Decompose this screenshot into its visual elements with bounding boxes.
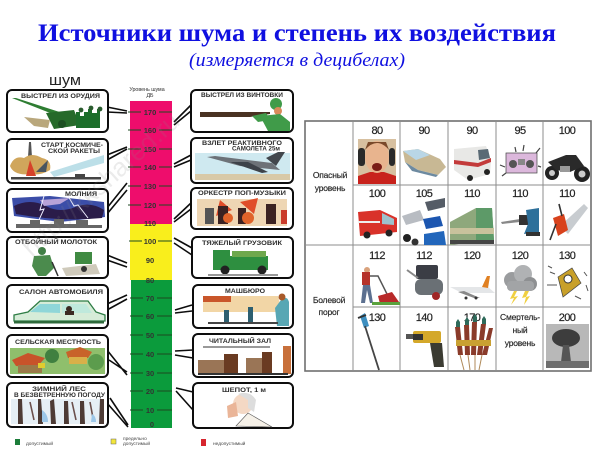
legend: limit: допустимый	[123, 440, 150, 447]
chart: noise level scale: 130	[144, 182, 156, 191]
panel: car interior	[7, 285, 127, 328]
label: lethal level: ный	[513, 325, 528, 335]
table numbers: 112	[369, 250, 385, 262]
icon: fire engine	[358, 210, 397, 238]
label: lethal level: уровень	[505, 338, 536, 348]
chart: noise level scale: 30	[146, 369, 154, 378]
icon: thundercloud	[504, 265, 537, 305]
panel: lightning	[7, 183, 127, 232]
panel: heavy truck	[174, 237, 293, 278]
icon: jackhammer	[358, 313, 379, 370]
chart: noise level scale: 120	[144, 201, 156, 210]
chart: noise level scale: 20	[146, 387, 154, 396]
panel: rifle shot	[174, 90, 293, 132]
table numbers: 90	[466, 125, 478, 137]
legend: limit	[111, 437, 150, 447]
table numbers: 120	[512, 250, 529, 262]
panel: winter forest: ЗИМНИЙ ЛЕС	[32, 384, 86, 393]
panel: countryside	[7, 335, 127, 377]
chart: noise level scale: 40	[146, 350, 154, 359]
legend: limit: предельно	[123, 437, 147, 442]
panel: reading room	[175, 334, 293, 377]
legend: permissible: допустимый	[26, 440, 53, 447]
chart: noise level scale: 110	[144, 219, 156, 228]
chart: noise level scale: 140	[144, 163, 156, 172]
chart: noise level scale: 90	[146, 256, 154, 265]
label: dangerous level	[313, 170, 348, 193]
panel: whisper	[176, 383, 293, 428]
icon: chainsaw	[550, 204, 588, 240]
legend	[15, 437, 246, 447]
scale caption: Уровень шума	[129, 87, 165, 93]
chart: noise level scale: ДБ	[146, 93, 154, 99]
icon: pneumatic drill	[406, 331, 444, 367]
chart: noise level scale: 150	[144, 145, 156, 154]
label: pain threshold: порог	[319, 307, 340, 317]
chart: noise level scale: 160	[144, 126, 156, 135]
icon: motorcycle	[545, 155, 590, 182]
label: pain threshold: Болевой	[313, 295, 346, 305]
chart: noise level scale: 80	[146, 276, 154, 285]
table numbers: 112	[416, 250, 432, 262]
icon: compressor	[407, 265, 443, 300]
heading: noise: шум	[49, 72, 81, 89]
title: Источники шума и степень их воздействия	[38, 20, 556, 47]
panel: jackhammer: ОТБОЙНЫЙ МОЛОТОК	[15, 237, 97, 246]
icon: boombox	[500, 145, 541, 176]
chart: noise level scale: 70	[146, 294, 154, 303]
panel: car interior: САЛОН АВТОМОБИЛЯ	[19, 289, 103, 296]
icon: airliner	[450, 276, 495, 300]
table numbers: 130	[369, 312, 386, 324]
panel: typing pool	[175, 285, 293, 328]
panel: jet take-off: ВЗЛЕТ РЕАКТИВНОГО	[202, 140, 282, 147]
panel: jackhammer	[7, 237, 127, 278]
icon: yellow music box	[547, 266, 588, 299]
icon: nuclear explosion	[546, 324, 589, 368]
icon: ambulance	[454, 146, 491, 181]
panel: jet take-off	[174, 138, 293, 183]
panel: pop orchestra	[174, 188, 293, 229]
panel: whisper: ШЕПОТ, 1 м	[222, 387, 266, 394]
table numbers: 130	[559, 250, 576, 262]
table numbers: 95	[514, 125, 526, 137]
label: pain threshold	[313, 295, 346, 317]
panel: gun shot	[7, 90, 127, 132]
table numbers: 170	[464, 312, 481, 324]
icon: screaming child	[358, 139, 396, 184]
legend: permissible	[15, 439, 53, 447]
table numbers: 105	[416, 188, 433, 200]
chart: noise level scale: 100	[144, 237, 156, 246]
table numbers: 110	[512, 188, 528, 200]
table numbers: 90	[418, 125, 430, 137]
chart: noise level scale: 10	[146, 406, 154, 415]
panel: rifle shot: ВЫСТРЕЛ ИЗ ВИНТОВКИ	[201, 92, 283, 99]
panel: reading room: ЧИТАЛЬНЫЙ ЗАЛ	[209, 336, 272, 345]
chart: noise level scale	[128, 87, 172, 429]
chart: noise level scale: 60	[146, 312, 154, 321]
chart: noise level scale: 170	[144, 108, 156, 117]
table numbers: 140	[416, 312, 433, 324]
panel: jet take-off: САМОЛЕТА 25м	[232, 146, 280, 152]
table numbers: 100	[559, 125, 576, 137]
panel: lightning: МОЛНИЯ	[65, 191, 97, 198]
panel: countryside: СЕЛЬСКАЯ МЕСТНОСТЬ	[15, 339, 101, 346]
icon: rotary hammer	[501, 208, 540, 236]
icon: sports car	[403, 149, 446, 177]
watermark: http://kkshared.ru	[16, 106, 185, 262]
icon: lawn mower	[361, 267, 400, 305]
label: lethal level	[500, 312, 540, 348]
table numbers: 110	[464, 188, 480, 200]
panel: pop orchestra: ОРКЕСТР ПОП-МУЗЫКИ	[198, 190, 286, 197]
panel: winter forest: В БЕЗВЕТРЕННУЮ ПОГОДУ	[14, 392, 106, 399]
table numbers: 200	[559, 312, 576, 324]
label: dangerous level: Опасный	[313, 170, 348, 180]
subtitle: (измеряется в децибелах)	[189, 51, 405, 71]
icon: train	[450, 208, 494, 245]
legend: unacceptable	[201, 439, 246, 447]
panel: heavy truck: ТЯЖЕЛЫЙ ГРУЗОВИК	[202, 238, 282, 247]
table: noise sources	[305, 121, 591, 371]
table numbers	[369, 125, 576, 324]
table numbers: 110	[559, 188, 575, 200]
panel: rocket launch: СТАРТ КОСМИЧЕ-	[41, 142, 103, 149]
table numbers: 80	[371, 125, 383, 137]
chart: noise level scale: 50	[146, 331, 154, 340]
table numbers: 100	[369, 188, 386, 200]
panel: rocket launch: СКОЙ РАКЕТЫ	[48, 146, 100, 155]
label: dangerous level: уровень	[315, 183, 346, 193]
legend: unacceptable: недопустимый	[213, 440, 246, 447]
icon: vehicles	[402, 198, 446, 246]
table numbers: 120	[464, 250, 481, 262]
chart: noise level scale: 0	[150, 420, 154, 429]
panel: rocket launch	[7, 139, 127, 183]
panel: winter forest	[7, 383, 128, 427]
panel: gun shot: ВЫСТРЕЛ ИЗ ОРУДИЯ	[21, 93, 100, 100]
panel: typing pool: МАШБЮРО	[225, 288, 265, 295]
label: lethal level: Смертель-	[500, 312, 540, 322]
icon: fireworks	[455, 314, 493, 370]
